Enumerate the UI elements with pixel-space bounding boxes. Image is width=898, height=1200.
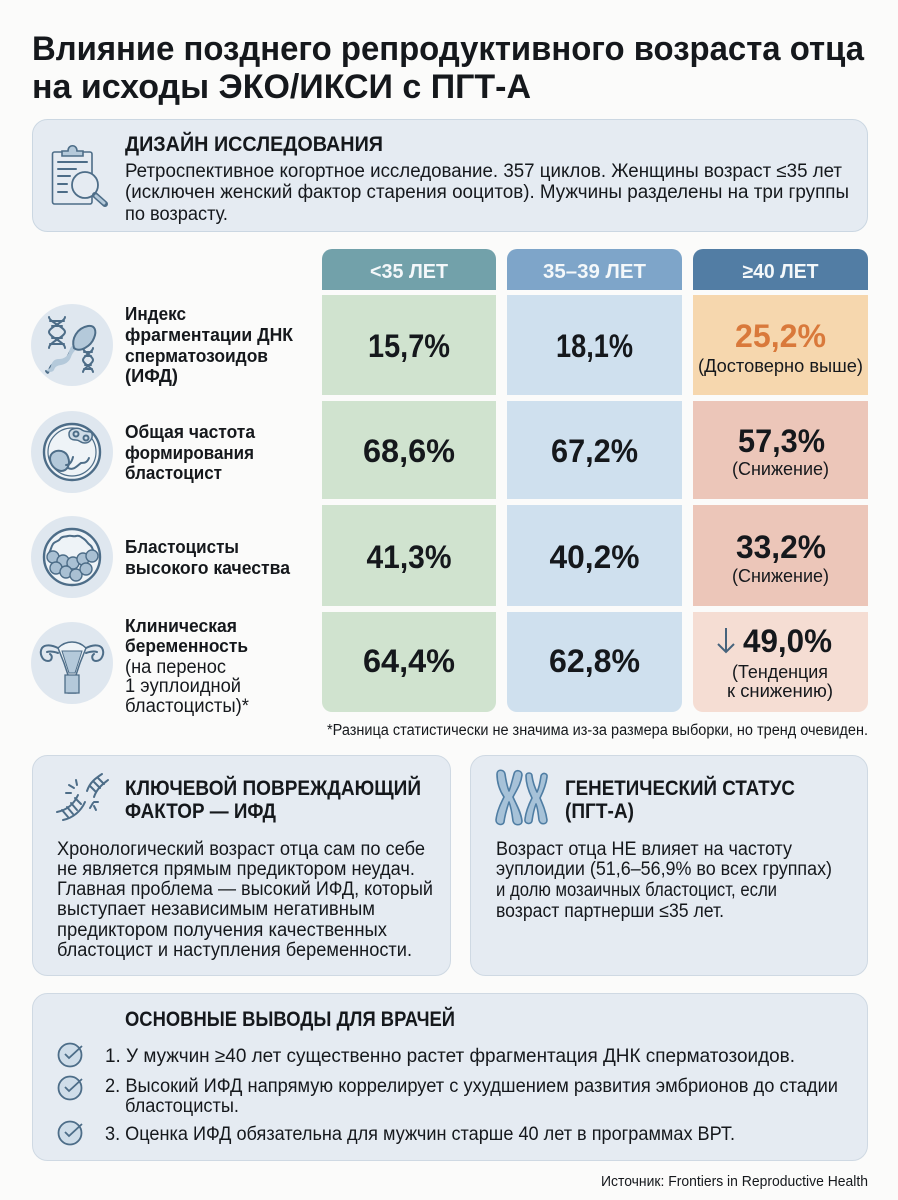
conclusion 2: бластоцисты. [125, 1096, 239, 1117]
cell: 18,1% [507, 295, 682, 395]
text: study design description: по возрасту. [125, 204, 228, 225]
text: key factor description: Хронологический возраст отца сам по себе [57, 839, 425, 860]
cell: 64,4% [322, 612, 496, 712]
cell: 49,0%: 49,0% [743, 623, 832, 659]
row: high quality blastocysts [31, 505, 868, 606]
source: Источник: Frontiers in Reproductive Health [601, 1173, 868, 1190]
icon: clipboard with magnifier [52, 146, 105, 204]
row label: беременность [125, 635, 248, 656]
icon: check 1 [58, 1044, 82, 1066]
heading: study design: ДИЗАЙН ИССЛЕДОВАНИЯ [125, 132, 383, 156]
icon: chromosomes [496, 770, 547, 825]
conclusion 2 [105, 1076, 838, 1117]
title [32, 30, 865, 106]
icon: sperm and DNA [31, 304, 113, 386]
row label: сперматозоидов [125, 345, 268, 366]
heading: key factor: КЛЮЧЕВОЙ ПОВРЕЖДАЮЩИЙ [125, 776, 421, 800]
column header: 35-39 [507, 249, 682, 290]
conclusion 1: 1. У мужчин ≥40 лет существенно растет фрагментация ДНК сперматозоидов. [105, 1046, 795, 1067]
cell: 57,3% [693, 401, 868, 499]
footnote: *Разница статистически не значима из-за размера выборки, но тренд очевиден. [327, 722, 868, 739]
icon: embryo in circle [31, 411, 113, 493]
heading: genetic status: (ПГТ-А) [565, 800, 634, 823]
cell: 57,3%: (Снижение) [732, 458, 829, 479]
column header: 35-39: 35–39 ЛЕТ [543, 261, 646, 283]
row label: Клиническая [125, 615, 237, 636]
row label: (на перенос [125, 657, 226, 678]
row label [125, 421, 256, 483]
cell: 57,3%: 57,3% [738, 423, 825, 459]
cell: 49,0% [693, 612, 868, 712]
text: study design description: Ретроспективное когортное исследование. 357 циклов. Женщины возраст ≤35 лет [125, 161, 842, 182]
row label [125, 303, 294, 386]
text: key factor description [57, 839, 433, 961]
cell: 40,2%: 40,2% [550, 539, 640, 575]
cell: 15,7%: 15,7% [368, 328, 450, 364]
row label [125, 615, 250, 717]
text: genetic status description: и долю мозаичных бластоцист, если [496, 880, 777, 901]
heading: key factor: ФАКТОР — ИФД [125, 800, 276, 823]
heading: conclusions: ОСНОВНЫЕ ВЫВОДЫ ДЛЯ ВРАЧЕЙ [125, 1007, 455, 1031]
cell: 18,1%: 18,1% [556, 328, 633, 364]
row label: Индекс [125, 303, 186, 324]
cell: 67,2%: 67,2% [551, 433, 638, 469]
panel: key damaging factor [32, 756, 450, 976]
cell: 68,6%: 68,6% [363, 433, 455, 469]
row label: Бластоцисты [125, 536, 239, 557]
row label: 1 эуплоидной [125, 676, 241, 697]
cell: 67,2% [507, 401, 682, 499]
row label: (ИФД) [125, 365, 178, 386]
column header: under 35 [322, 249, 496, 290]
icon: blastocyst [31, 516, 113, 598]
panel: study design [32, 120, 868, 232]
cell: 25,2%: (Достоверно выше) [698, 355, 863, 376]
cell: 41,3%: 41,3% [366, 539, 452, 575]
cell: 41,3% [322, 505, 496, 606]
text: genetic status description [496, 839, 832, 922]
row label: бластоцист [125, 462, 222, 483]
text: key factor description: выступает независимым негативным [57, 899, 375, 920]
cell: 62,8% [507, 612, 682, 712]
cell: 62,8%: 62,8% [549, 643, 640, 679]
cell: 15,7% [322, 295, 496, 395]
row: DNA fragmentation index [31, 295, 868, 395]
heading: genetic status [565, 776, 795, 823]
row label: формирования [125, 442, 254, 463]
panel: conclusions [32, 994, 868, 1160]
cell: 25,2%: 25,2% [735, 318, 826, 354]
row: clinical pregnancy [31, 612, 868, 717]
column header: 40 plus [693, 249, 868, 290]
conclusion 3: 3. Оценка ИФД обязательна для мужчин старше 40 лет в программах ВРТ. [105, 1124, 735, 1145]
row label: Общая частота [125, 421, 256, 442]
cell: 68,6% [322, 401, 496, 499]
cell: 33,2%: 33,2% [736, 529, 826, 565]
icon: check 3 [58, 1122, 82, 1144]
icon: check 2 [58, 1076, 82, 1100]
cell: 33,2%: (Снижение) [732, 565, 829, 586]
conclusion 2: 2. Высокий ИФД напрямую коррелирует с ухудшением развития эмбрионов до стадии [105, 1076, 838, 1097]
row label: бластоцисты)* [125, 696, 250, 717]
text: genetic status description: эуплоидии (51,6–56,9% во всех группах) [496, 859, 832, 880]
cell: 49,0%: к снижению) [727, 680, 833, 701]
icon: broken DNA [57, 774, 108, 820]
text: key factor description: бластоцист и наступления беременности. [57, 940, 412, 961]
title: на исходы ЭКО/ИКСИ с ПГТ-А [32, 68, 531, 106]
text: genetic status description: возраст партнерши ≤35 лет. [496, 901, 724, 922]
row label: высокого качества [125, 557, 291, 578]
column header: 40 plus: ≥40 ЛЕТ [742, 261, 818, 283]
column header: under 35: <35 ЛЕТ [370, 261, 448, 283]
text: key factor description: не является прямым предиктором неудач. [57, 859, 415, 880]
cell: 64,4%: 64,4% [363, 643, 455, 679]
cell: 49,0%: (Тенденция [732, 661, 828, 682]
text: key factor description: Главная проблема — высокий ИФД, который [57, 879, 433, 900]
icon: uterus [31, 622, 113, 704]
title: Влияние позднего репродуктивного возраста отца [32, 30, 865, 68]
text: study design description: (исключен женский фактор старения ооцитов). Мужчины разделены на три группы [125, 182, 849, 203]
row label [125, 536, 291, 578]
cell: 40,2% [507, 505, 682, 606]
row label: фрагментации ДНК [125, 324, 294, 345]
text: genetic status description: Возраст отца НЕ влияет на частоту [496, 839, 792, 860]
panel: genetic status [470, 756, 868, 976]
heading: key factor [125, 776, 421, 823]
heading: genetic status: ГЕНЕТИЧЕСКИЙ СТАТУС [565, 776, 795, 800]
row: blastocyst formation [31, 401, 868, 499]
text: key factor description: предиктором получения качественных [57, 920, 387, 941]
text: study design description [125, 161, 849, 225]
cell: 33,2% [693, 505, 868, 606]
cell: 25,2% [693, 295, 868, 395]
